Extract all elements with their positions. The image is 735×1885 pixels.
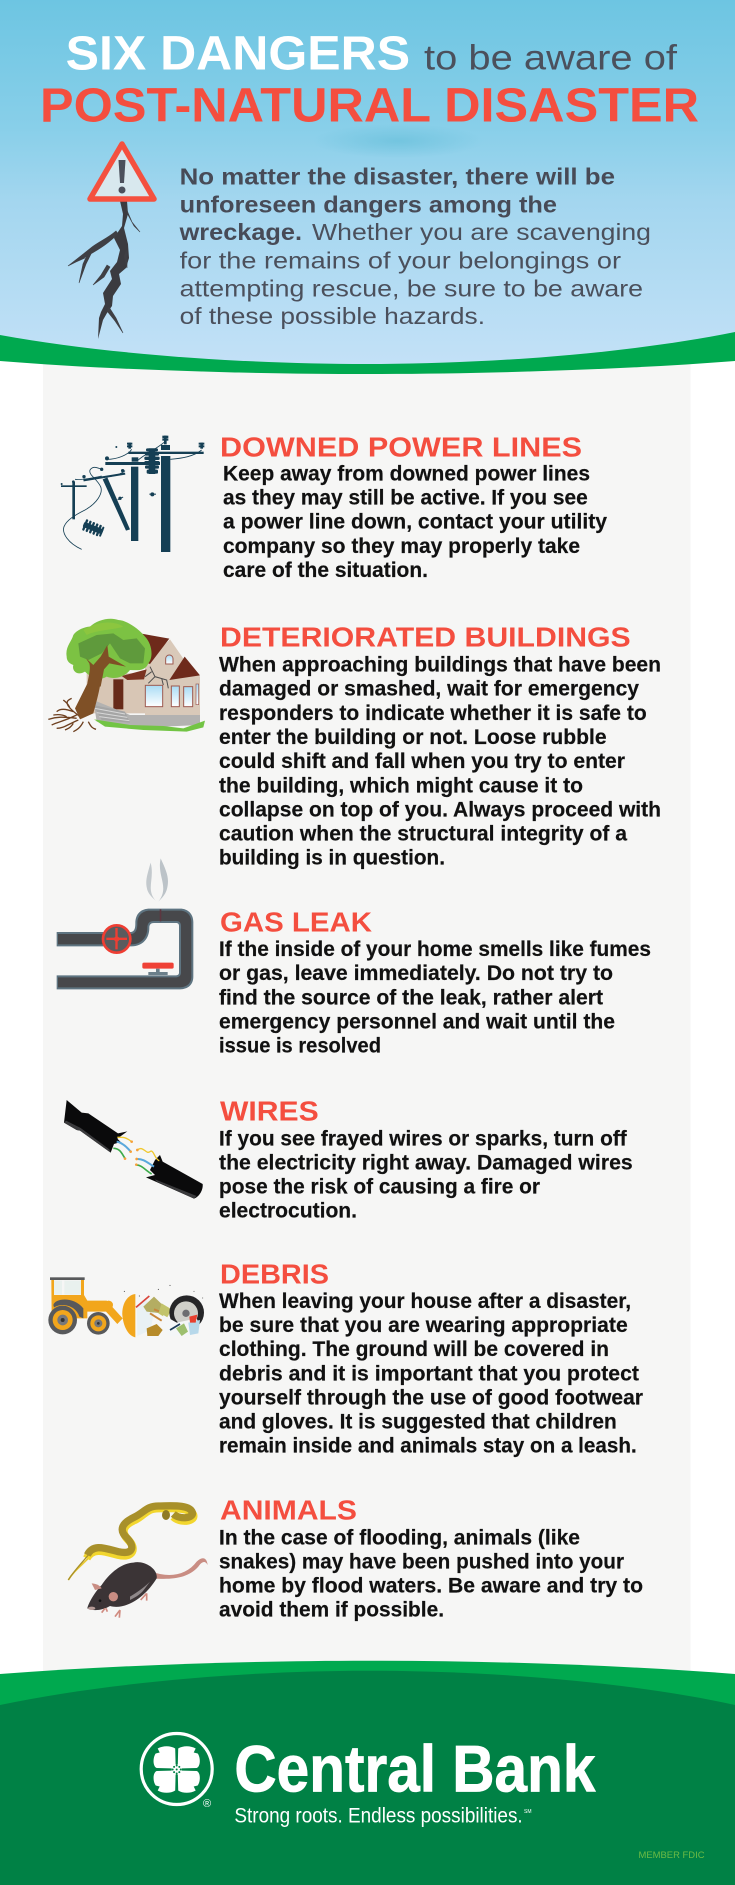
body: animals: In the case of flooding, animals (like	[219, 1525, 580, 1549]
body: wires	[219, 1126, 633, 1222]
intro text: No matter the disaster, there will be	[180, 163, 615, 189]
body: deteriorated buildings: building is in question.	[219, 846, 445, 870]
body: deteriorated buildings: collapse on top of you. Always proceed with	[219, 797, 661, 821]
body: deteriorated buildings: responders to indicate whether it is safe to	[219, 701, 647, 725]
logo: Central Bank	[141, 1732, 596, 1828]
heading: downed power lines: DOWNED POWER LINES	[220, 432, 582, 463]
body: deteriorated buildings: When approaching buildings that have been	[219, 652, 661, 676]
panel: debris	[48, 1258, 644, 1458]
body: deteriorated buildings: could shift and fall when you try to enter	[219, 749, 626, 773]
icon: house with fallen tree	[48, 619, 205, 732]
body: gas leak: find the source of the leak, rather alert	[219, 985, 603, 1009]
tagline: Strong roots. Endless possibilities.	[234, 1805, 523, 1828]
wordmark: Central Bank	[234, 1732, 596, 1806]
intro text: for the remains of your belongings or	[180, 247, 621, 273]
body: wires: electrocution.	[219, 1198, 357, 1222]
title: POST-NATURAL DISASTER	[40, 80, 699, 133]
heading: deteriorated buildings: DETERIORATED BUILDINGS	[220, 622, 631, 653]
body: gas leak: emergency personnel and wait until the	[219, 1009, 615, 1033]
body: animals: avoid them if possible.	[219, 1598, 444, 1622]
service mark: SM	[524, 1809, 532, 1815]
icon: loader and debris	[48, 1277, 204, 1337]
icon: warning sign with crack	[68, 144, 154, 339]
body: animals: home by flood waters. Be aware and try to	[219, 1574, 643, 1598]
intro text: Whether you are scavenging	[312, 219, 651, 245]
heading: wires: WIRES	[220, 1096, 319, 1127]
body: gas leak: If the inside of your home smells like fumes	[219, 937, 651, 961]
footer green banner	[0, 1661, 735, 1885]
heading: debris: DEBRIS	[220, 1258, 329, 1289]
title: SIX DANGERS	[66, 28, 410, 80]
body: debris: yourself through the use of good footwear	[219, 1385, 644, 1409]
heading: animals: ANIMALS	[220, 1494, 357, 1525]
body: downed power lines: as they may still be active. If you see	[223, 486, 588, 510]
body: debris: be sure that you are wearing appropriate	[219, 1313, 628, 1337]
body: deteriorated buildings: enter the building or not. Loose rubble	[219, 725, 607, 749]
panel: wires	[64, 1096, 633, 1222]
heading: gas leak: GAS LEAK	[220, 906, 372, 937]
body: gas leak	[219, 937, 651, 1058]
body: deteriorated buildings: caution when the structural integrity of a	[219, 822, 628, 846]
body: debris	[219, 1289, 644, 1458]
body: animals: snakes) may have been pushed into your	[219, 1549, 625, 1573]
panel: deteriorated buildings	[48, 619, 661, 870]
body: wires: pose the risk of causing a fire or	[219, 1174, 541, 1198]
body: downed power lines	[223, 462, 607, 582]
member fdic note: MEMBER FDIC	[638, 1850, 705, 1861]
body: wires: If you see frayed wires or sparks, turn off	[219, 1126, 628, 1150]
body: downed power lines: a power line down, contact your utility	[223, 510, 607, 534]
body: debris: debris and it is important that you protect	[219, 1361, 639, 1385]
icon: flower roundel	[141, 1734, 212, 1804]
body: debris: When leaving your house after a disaster,	[219, 1289, 631, 1313]
body: downed power lines: Keep away from downed power lines	[223, 462, 590, 486]
intro text: attempting rescue, be sure to be aware	[180, 275, 643, 301]
body: deteriorated buildings	[219, 652, 661, 870]
body: gas leak: issue is resolved	[219, 1034, 381, 1058]
body: deteriorated buildings: damaged or smashed, wait for emergency	[219, 676, 639, 700]
body: debris: remain inside and animals stay on a leash.	[219, 1434, 637, 1458]
intro text	[178, 163, 651, 329]
title	[40, 28, 699, 133]
body: downed power lines: company so they may properly take	[223, 534, 580, 558]
body: debris: and gloves. It is suggested that children	[219, 1410, 617, 1434]
icon: leaking gas pipe	[57, 858, 193, 989]
body: debris: clothing. The ground will be covered in	[219, 1337, 609, 1361]
intro text: wreckage.	[178, 219, 302, 245]
body: downed power lines: care of the situation.	[223, 558, 428, 582]
icon: power lines	[61, 436, 204, 552]
icon: snake and rat	[68, 1506, 208, 1618]
content panel background	[43, 340, 690, 1685]
panel: downed power lines	[61, 432, 607, 582]
body: wires: the electricity right away. Damaged wires	[219, 1150, 633, 1174]
body: gas leak: or gas, leave immediately. Do not try to	[219, 961, 613, 985]
title: to be aware of	[424, 38, 677, 78]
panel: gas leak	[57, 858, 651, 1058]
icon: frayed cable	[64, 1100, 203, 1199]
panel: animals	[68, 1494, 643, 1622]
body: deteriorated buildings: the building, which might cause it to	[219, 773, 583, 797]
header sky banner	[0, 0, 735, 374]
intro text: of these possible hazards.	[180, 303, 485, 329]
intro text: unforeseen dangers among the	[180, 191, 557, 217]
body: animals	[219, 1525, 643, 1622]
registered mark: ®	[203, 1798, 211, 1810]
